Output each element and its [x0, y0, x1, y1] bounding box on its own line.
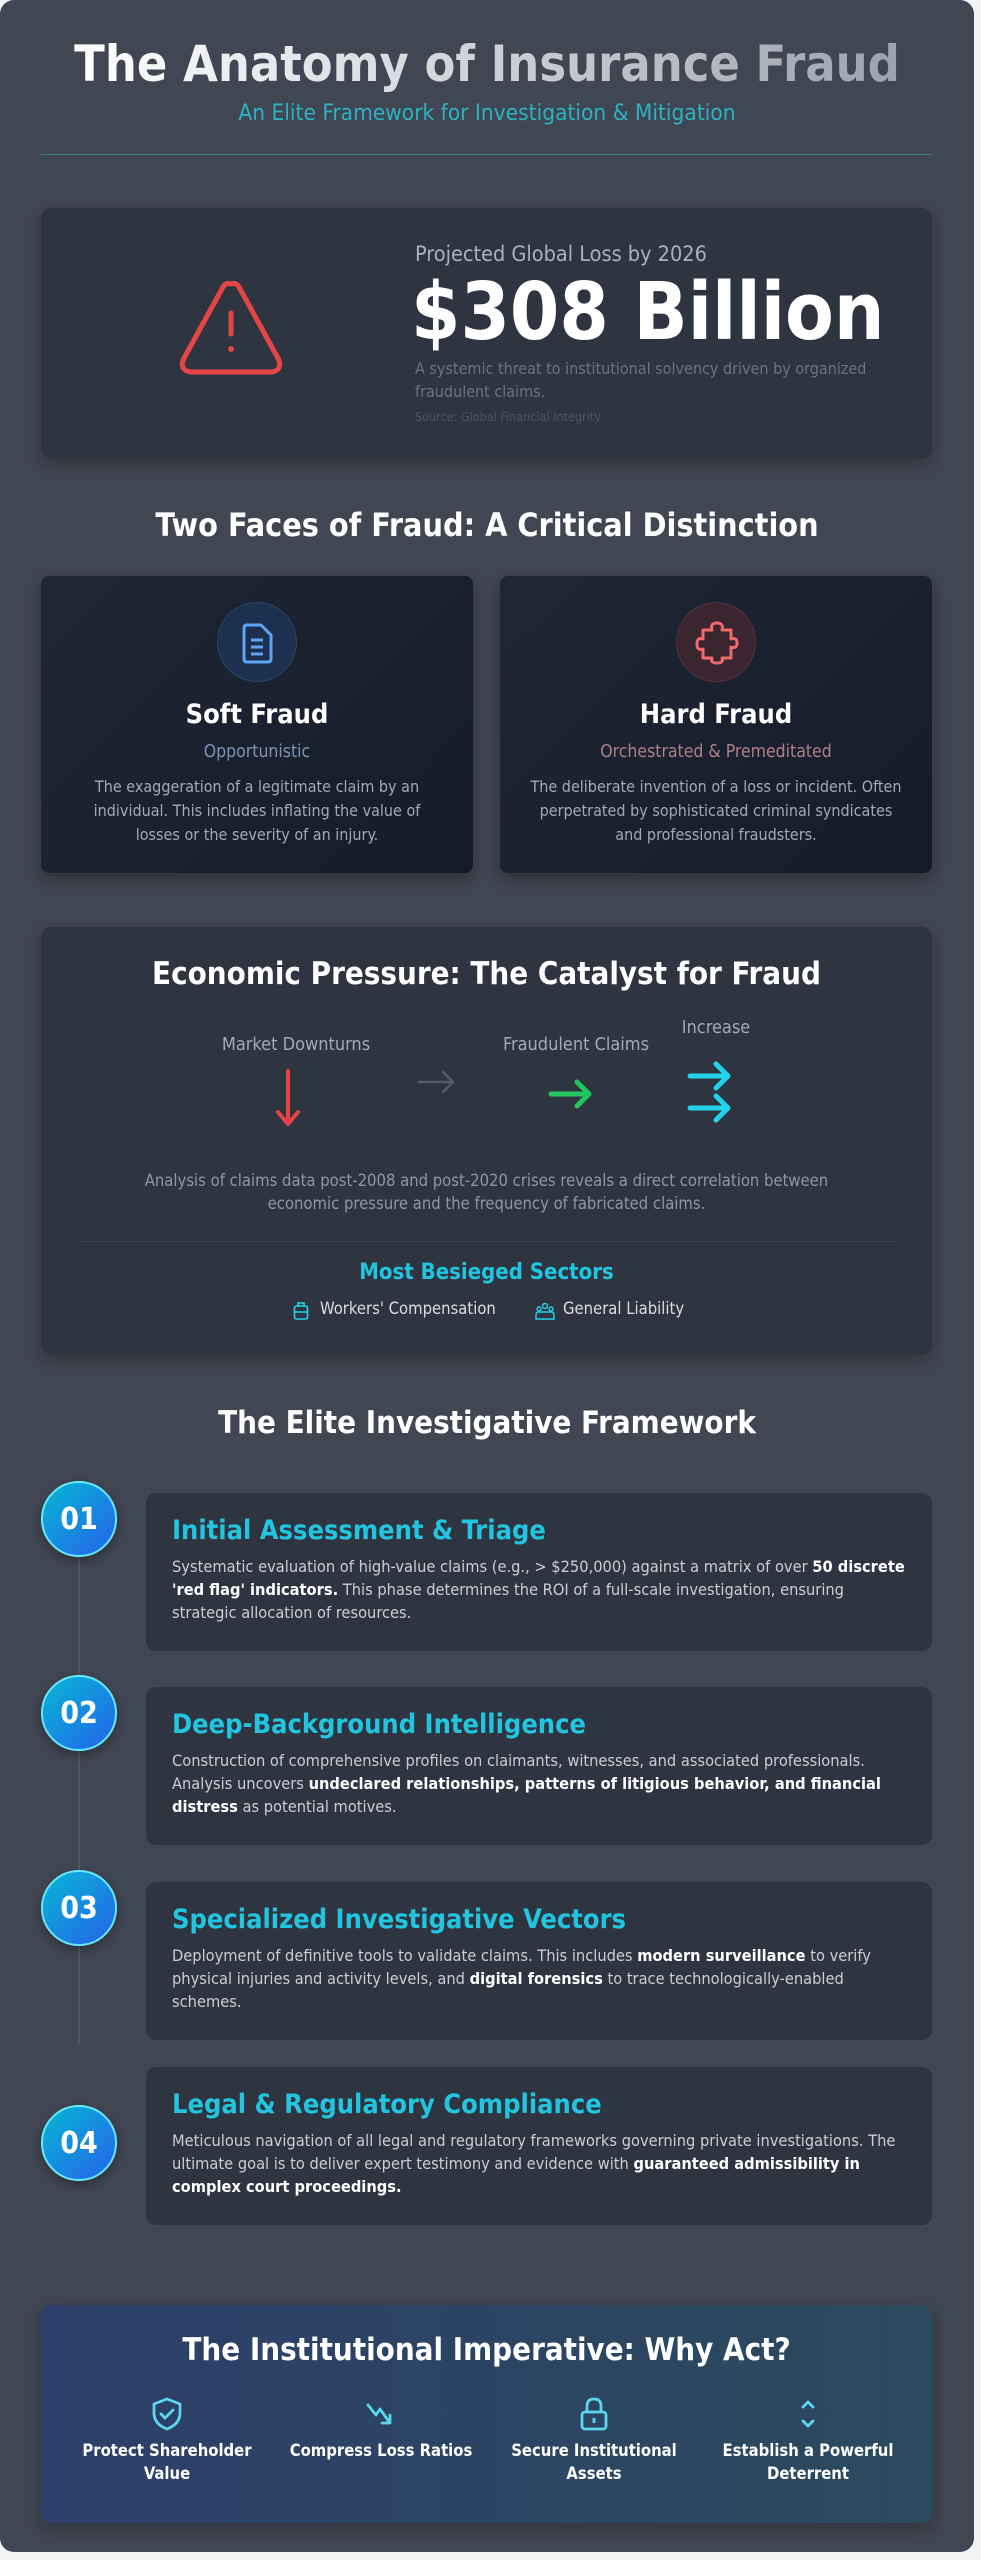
- arrows: cyan increase: [688, 1062, 730, 1122]
- sectors heading: Most Besieged Sectors: [359, 1260, 614, 1285]
- icon: briefcase: [294, 1302, 308, 1320]
- stat description: A systemic threat to institutional solvency driven by organized fraudulent claims.: [415, 359, 866, 401]
- step card: [146, 2067, 932, 2225]
- item: establish deterrent: [723, 2400, 893, 2483]
- panel: projected loss stat: [41, 208, 932, 458]
- number badge: 03: [60, 1890, 98, 1926]
- step card: Initial Assessment & Triage: [172, 1515, 546, 1546]
- heading: two faces: Two Faces of Fraud: A Critical Distinction: [155, 506, 819, 544]
- analysis text: Analysis of claims data post-2008 and post-2020 crises reveals a direct correlation between economic pressure and the frequency of fabricated claims.: [145, 1171, 828, 1213]
- item: secure institutional assets: [511, 2398, 677, 2483]
- panel: hard fraud: [500, 576, 932, 873]
- icon: chevrons: [802, 2400, 814, 2428]
- card description: The exaggeration of a legitimate claim by an individual. This includes inflating the value of losses or the severity of an injury.: [94, 777, 420, 844]
- item: protect shareholder value: Protect Shareholder Value: [82, 2441, 252, 2483]
- timeline line: [78, 1540, 80, 2045]
- step card: Deployment of definitive tools to validate claims. This includes modern surveillance to verify physical injuries and activity levels, and digital forensics to trace technologically-enabled: [172, 1946, 871, 1988]
- heading: The Institutional Imperative: Why Act?: [182, 2332, 791, 2368]
- step card: Legal & Regulatory Compliance: [172, 2089, 602, 2120]
- item: establish deterrent: Establish a Powerful Deterrent: [723, 2441, 893, 2483]
- title: The Anatomy of Insurance Fraud: [74, 35, 900, 93]
- card subtitle: Opportunistic: [204, 742, 310, 762]
- step card: strategic allocation of resources.: [172, 1603, 411, 1622]
- step card: [146, 1882, 932, 2040]
- step 2: [39, 1675, 932, 1845]
- stat value: $308 Billion: [411, 266, 884, 358]
- icon: puzzle: [676, 602, 756, 682]
- sectors list: Workers' Compensation: [320, 1299, 496, 1318]
- subtitle: An Elite Framework for Investigation & Mitigation: [238, 100, 736, 126]
- arrow: green right: [548, 1080, 592, 1108]
- icon: document: [217, 602, 297, 682]
- card title: Hard Fraud: [640, 699, 792, 730]
- number badge: 02: [60, 1696, 98, 1730]
- step card: Construction of comprehensive profiles on claimants, witnesses, and associated professionals. Analysis uncovers undeclared relationships, patterns of litigious behavior, and financial distress as potential motives.: [172, 1751, 881, 1816]
- heading: framework: The Elite Investigative Framework: [218, 1405, 756, 1441]
- label: market downturns: Market Downturns: [222, 1034, 370, 1055]
- number badge: [41, 2105, 117, 2181]
- step card: [146, 1493, 932, 1651]
- icon: warning triangle: [180, 280, 282, 374]
- step card: Systematic evaluation of high-value claims (e.g., > $250,000) against a matrix of over 50 discrete 'red flag' indicators. This phase determines the ROI of a full-scale investigation, ensuring: [172, 1557, 905, 1599]
- card description: The deliberate invention of a loss or incident. Often perpetrated by sophisticated criminal syndicates and professional fraudsters.: [530, 777, 902, 844]
- step card: [146, 1687, 932, 1845]
- step card: Meticulous navigation of all legal and regulatory frameworks governing private investigations. The ultimate goal is to deliver expert testimony and evidence with guaranteed admissibility in complex court proceedings.: [172, 2131, 895, 2196]
- panel: economic pressure: [41, 927, 932, 1354]
- icon: shield: [152, 2398, 182, 2430]
- panel: soft fraud: [41, 576, 473, 873]
- number badge: [41, 1675, 117, 1751]
- number badge: 04: [60, 2126, 98, 2160]
- stat label: Projected Global Loss by 2026: [415, 242, 707, 267]
- label: increase: Increase: [682, 1017, 750, 1038]
- item: secure institutional assets: Secure Institutional Assets: [511, 2441, 677, 2483]
- heading: Economic Pressure: The Catalyst for Fraud: [152, 956, 821, 992]
- step 4: [39, 2067, 932, 2225]
- icon: people: [535, 1302, 555, 1320]
- number badge: [41, 1481, 117, 1557]
- source: Source: Global Financial Integrity: [415, 409, 601, 424]
- number badge: 01: [60, 1502, 98, 1536]
- arrow: gray right: [418, 1070, 454, 1094]
- step 1: [39, 1481, 932, 1651]
- step card: Deep-Background Intelligence: [172, 1709, 586, 1740]
- card subtitle: Orchestrated & Premeditated: [600, 742, 832, 762]
- item: protect shareholder value: [82, 2398, 252, 2483]
- card title: Soft Fraud: [186, 699, 328, 730]
- number badge: [41, 1870, 117, 1946]
- item: compress loss ratios: [290, 2404, 472, 2460]
- arrow: red down: [276, 1069, 300, 1126]
- panel: institutional imperative: [41, 2305, 932, 2523]
- icon: trend down: [366, 2404, 392, 2424]
- item: compress loss ratios: Compress Loss Ratios: [290, 2441, 472, 2460]
- label: fraudulent claims: Fraudulent Claims: [503, 1034, 649, 1055]
- sectors list: General Liability: [563, 1299, 684, 1318]
- step 3: [39, 1870, 932, 2040]
- icon: lock: [580, 2398, 608, 2430]
- sectors list: [294, 1299, 684, 1320]
- step card: schemes.: [172, 1992, 242, 2011]
- step card: Specialized Investigative Vectors: [172, 1904, 626, 1935]
